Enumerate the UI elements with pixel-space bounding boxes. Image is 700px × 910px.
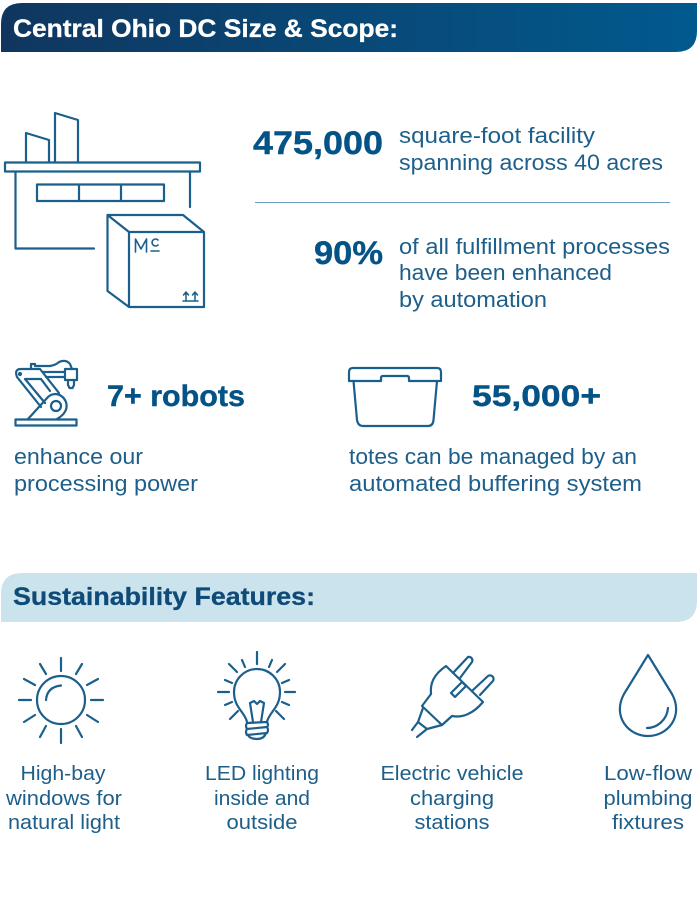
stat: 55,000+ totes xyxy=(349,380,642,496)
stat: 55,000+ totes: automated buffering system xyxy=(349,471,642,496)
caption: Low-flow plumbing xyxy=(604,762,692,834)
caption: High-bay windows: High-bay xyxy=(20,762,106,785)
section banner: Sustainability Features: Sustainability Features: xyxy=(13,583,315,611)
caption: Electric vehicle charging: stations xyxy=(414,811,490,834)
caption: High-bay windows: natural light xyxy=(8,811,120,834)
stat: 90% of fulfillment processes automated: have been enhanced xyxy=(399,260,612,285)
stat: 90% of fulfillment processes automated xyxy=(314,234,670,312)
stat: 55,000+ totes: 55,000+ xyxy=(472,380,601,413)
caption: LED lighting: LED lighting xyxy=(205,762,319,785)
stat: 7+ robots xyxy=(14,380,245,496)
caption: Low-flow plumbing: plumbing xyxy=(604,787,692,810)
stat: 475,000 square-foot facility xyxy=(253,123,663,175)
caption: Electric vehicle charging xyxy=(380,762,524,834)
stat: 7+ robots: enhance our xyxy=(14,444,143,469)
icon: water drop xyxy=(620,655,676,736)
icon: light bulb xyxy=(218,652,295,739)
stat: 7+ robots: processing power xyxy=(14,471,198,496)
stat: 475,000 square-foot facility: spanning across 40 acres xyxy=(399,150,663,175)
stat: 55,000+ totes: totes can be managed by an xyxy=(349,444,637,469)
caption: LED lighting xyxy=(205,762,319,834)
header banner: Central Ohio DC Size & Scope: Central Ohio DC Size & Scope: xyxy=(13,15,398,43)
caption: Low-flow plumbing: fixtures xyxy=(612,811,684,834)
stat: 90% of fulfillment processes automated: by automation xyxy=(399,287,547,312)
caption: High-bay windows: windows for xyxy=(5,787,122,810)
section banner: Sustainability Features xyxy=(1,573,697,622)
stat: 475,000 square-foot facility: square-foot facility xyxy=(399,123,595,148)
caption: High-bay windows xyxy=(5,762,122,834)
caption: Low-flow plumbing: Low-flow xyxy=(604,762,692,785)
stat: 475,000 square-foot facility: 475,000 xyxy=(253,125,383,161)
icon: sun xyxy=(19,658,103,743)
stat: 7+ robots: 7+ robots xyxy=(107,380,245,413)
icon: electric plug xyxy=(412,657,494,737)
caption: LED lighting: inside and xyxy=(214,787,310,810)
icon: warehouse and McKesson box xyxy=(5,113,204,307)
stat: 90% of fulfillment processes automated: of all fulfillment processes xyxy=(399,234,670,259)
caption: Electric vehicle charging: Electric vehicle xyxy=(380,762,524,785)
icon: robot arm xyxy=(16,361,77,426)
header banner: Central Ohio DC Size & Scope xyxy=(1,3,697,52)
caption: LED lighting: outside xyxy=(226,811,298,834)
divider xyxy=(255,202,670,204)
caption: Electric vehicle charging: charging xyxy=(410,787,494,810)
stat: 90% of fulfillment processes automated: 90% xyxy=(314,235,383,271)
icon: tote xyxy=(349,368,441,426)
